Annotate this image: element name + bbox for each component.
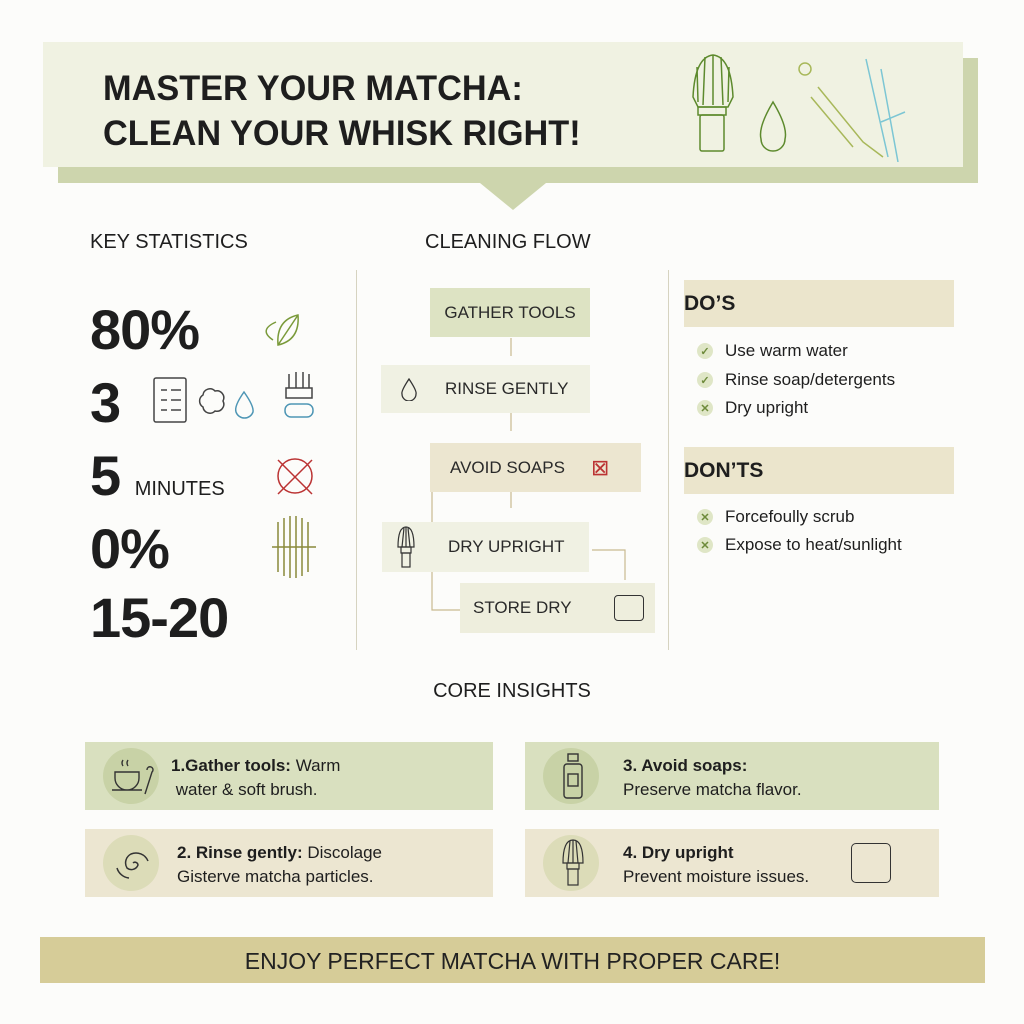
heading: key statistics: KEY STATISTICS bbox=[90, 231, 248, 253]
title bbox=[103, 69, 581, 153]
card 4: Prevent moisture issues. bbox=[623, 867, 809, 886]
card 4 bbox=[525, 829, 939, 897]
heading: cleaning flow: CLEANING FLOW bbox=[425, 231, 591, 253]
text: ✓ bbox=[700, 374, 710, 386]
flow: AVOID SOAPS bbox=[450, 458, 565, 476]
card 2 bbox=[85, 829, 493, 897]
card 3: 3. Avoid soaps: bbox=[623, 756, 747, 775]
panel: don'ts: DON’TS bbox=[684, 459, 763, 482]
text: ✓ bbox=[700, 346, 710, 358]
stats: 80% bbox=[90, 298, 199, 361]
icon: whisk, drop, bamboo bbox=[692, 54, 906, 162]
text: Forcefoully scrub bbox=[725, 507, 854, 526]
card 1: water & soft brush. bbox=[176, 780, 317, 799]
flow: ⊠ bbox=[591, 454, 609, 480]
panel: do's: DO’S bbox=[684, 292, 735, 315]
card 3: Preserve matcha flavor. bbox=[623, 780, 802, 799]
card 2: Gisterve matcha particles. bbox=[177, 867, 374, 886]
text: ✕ bbox=[700, 402, 710, 414]
flow bbox=[381, 288, 655, 633]
card 1: 1.Gather tools: Warm bbox=[171, 756, 340, 775]
header banner bbox=[43, 42, 978, 210]
card 4: 4. Dry upright bbox=[623, 843, 734, 862]
text: Rinse soap/detergents bbox=[725, 370, 895, 389]
text: ✕ bbox=[700, 540, 710, 552]
flow: DRY UPRIGHT bbox=[448, 537, 565, 556]
text: ✕ bbox=[700, 512, 710, 524]
text: Expose to heat/sunlight bbox=[725, 535, 902, 554]
footer banner bbox=[40, 937, 985, 983]
title: CLEAN YOUR WHISK RIGHT! bbox=[103, 114, 581, 153]
stats: 5 MINUTES bbox=[90, 444, 225, 507]
card 1 bbox=[85, 742, 493, 810]
panel: do's bbox=[684, 280, 954, 327]
panel: don'ts bbox=[684, 447, 954, 494]
flow: RINSE GENTLY bbox=[445, 379, 568, 398]
stats: 3 bbox=[90, 371, 120, 434]
stat icons bbox=[153, 314, 316, 578]
text: Use warm water bbox=[725, 341, 848, 360]
footer banner: ENJOY PERFECT MATCHA WITH PROPER CARE! bbox=[245, 948, 780, 974]
text: Dry upright bbox=[725, 398, 808, 417]
stats bbox=[90, 298, 316, 649]
card 2: 2. Rinse gently: Discolage bbox=[177, 843, 382, 862]
flow: GATHER TOOLS bbox=[444, 302, 576, 322]
stats: 15-20 bbox=[90, 586, 228, 649]
title: MASTER YOUR MATCHA: bbox=[103, 69, 523, 108]
stats: 0% bbox=[90, 517, 169, 580]
heading: core insights: CORE INSIGHTS bbox=[433, 680, 591, 702]
card 3 bbox=[525, 742, 939, 810]
flow: STORE DRY bbox=[473, 598, 572, 617]
